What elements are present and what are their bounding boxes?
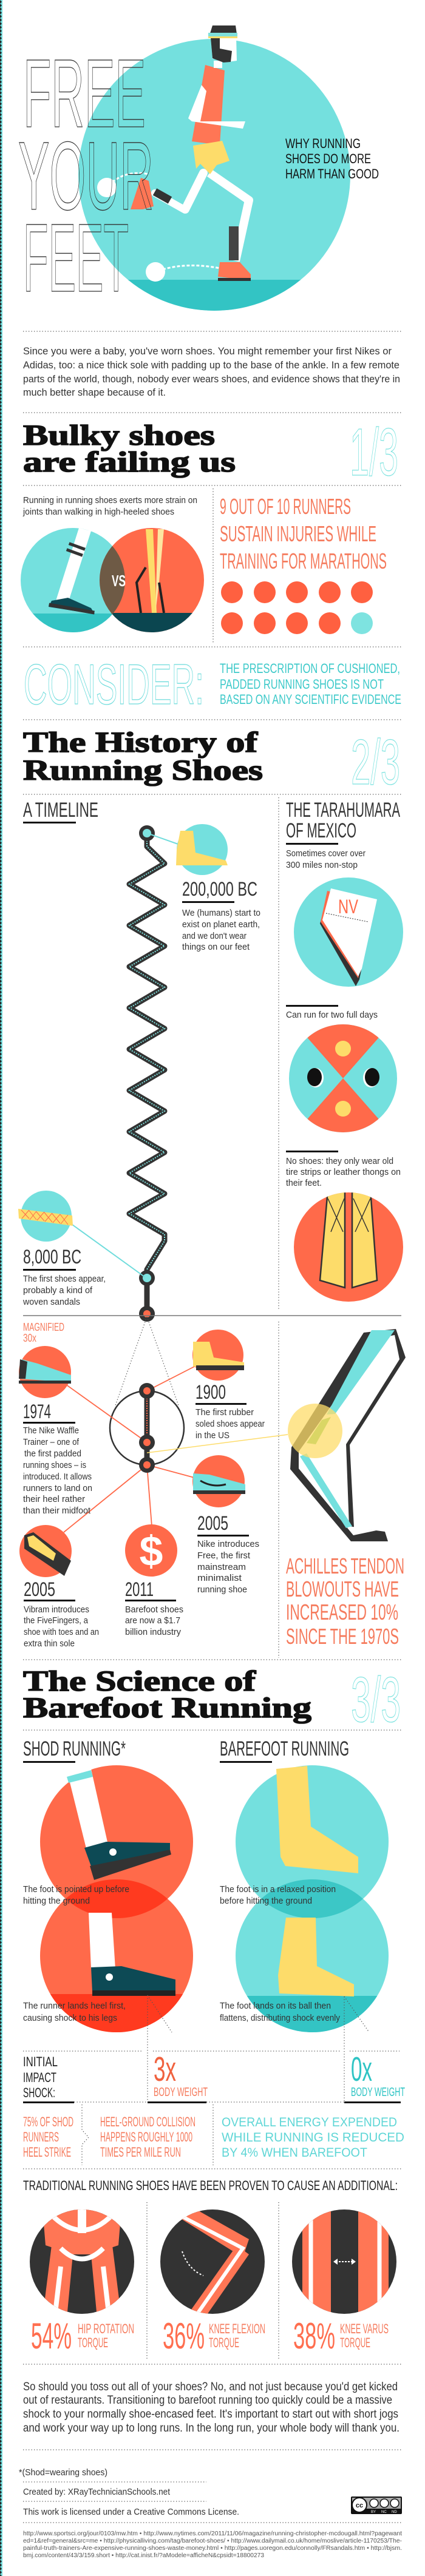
captions: foot position xyxy=(23,1884,336,1906)
heading: The History of Running Shoes: Running Shoes xyxy=(23,754,263,786)
icon: Nevada map xyxy=(294,877,403,987)
heading: Bulky shoes are failing us: Bulky shoes xyxy=(23,419,215,451)
subtitle: HARM THAN GOOD xyxy=(285,166,379,181)
timeline entry: 2005 Vibram: 2005 xyxy=(24,1578,55,1600)
conclusion paragraph xyxy=(23,2381,399,2435)
icon: Vibram FiveFingers xyxy=(19,1525,72,1577)
intro paragraph: much better shape because of it. xyxy=(23,387,166,398)
stat: heel-ground collision xyxy=(100,2114,195,2160)
illustration: shod running circles xyxy=(36,1765,200,2037)
stat: heel-ground collision: HAPPENS ROUGHLY 1000 xyxy=(100,2129,192,2145)
icon: landing bare foot xyxy=(278,1918,354,1996)
label: magnified 30x xyxy=(23,1321,64,1344)
timeline entry: 2011: Barefoot shoes xyxy=(125,1604,183,1615)
stat: 3x body weight: BODY WEIGHT xyxy=(154,2086,208,2099)
timeline entry: 1974: than their midfoot xyxy=(23,1506,91,1516)
intro paragraph: Since you were a baby, you've worn shoes. You might remember your first Nikes or xyxy=(23,345,392,357)
timeline entry: 2005 Vibram: Vibram introduces xyxy=(24,1604,89,1615)
hero illustration: runner in circle xyxy=(73,25,358,316)
icon: ball and chain front xyxy=(146,262,220,282)
icon: dollar sign xyxy=(125,1524,177,1577)
title: FREE YOUR FEET: FREE xyxy=(23,39,146,147)
timeline entry: 2005 Nike Free: Free, the first xyxy=(197,1550,251,1561)
timeline entry: 2005 Nike Free xyxy=(197,1512,259,1595)
stat: 36% knee flexion torque: TORQUE xyxy=(209,2335,239,2350)
heading: The Science of Barefoot Running xyxy=(23,1665,311,1724)
icon: shoe landing heel xyxy=(89,1913,175,1996)
subheading: shod running: SHOD RUNNING* xyxy=(23,1737,126,1760)
stat: 38% knee varus torque: TORQUE xyxy=(340,2335,370,2350)
stat: 75% heel strike: HEEL STRIKE xyxy=(23,2145,71,2160)
sources: painful-truth-trainers-Are-expensive-running-shoes-waste-money.html • http://pages.uoregon.edu/connolly/FRsandals.htm • http://bjsm. xyxy=(23,2545,402,2552)
text: YOUR xyxy=(18,121,154,230)
footnote: *(Shod=wearing shoes) xyxy=(19,2467,107,2478)
label: magnified 30x: 30x xyxy=(23,1332,36,1344)
icon: 1900 boot xyxy=(192,1330,244,1381)
timeline entry: 1974 xyxy=(23,1401,92,1516)
icon: bare foot 200,000 BC xyxy=(151,824,228,875)
timeline entry: 2005 Vibram: shoe with toes and an xyxy=(24,1627,99,1637)
label: initial impact shock: SHOCK: xyxy=(23,2085,55,2100)
subheading: shod running xyxy=(23,1737,126,1763)
stat: energy reduced 4%: WHILE RUNNING IS REDUCED xyxy=(222,2131,404,2145)
timeline entry: 200,000 BC: We (humans) start to xyxy=(182,908,260,918)
timeline entry: 200,000 BC: and we don't wear xyxy=(182,931,246,941)
captions: landing: The foot lands on its ball then xyxy=(220,2001,331,2011)
timeline entry: 2005 Vibram xyxy=(24,1578,99,1649)
captions: foot position: The foot is in a relaxed position xyxy=(220,1884,336,1895)
text: two full days: Can run for two full days xyxy=(286,1010,378,1020)
stat: energy reduced 4% xyxy=(222,2115,404,2160)
timeline entry: 200,000 BC xyxy=(182,878,260,952)
timeline entry: 1900: 1900 xyxy=(195,1381,226,1403)
timeline zigzag path xyxy=(129,825,165,1322)
captions: foot position: The foot is pointed up before xyxy=(23,1884,129,1895)
stat: heel-ground collision: HEEL-GROUND COLLISION xyxy=(100,2114,195,2129)
timeline entry: 200,000 BC: 200,000 BC xyxy=(182,878,257,900)
license text: This work is licensed under a Creative Commons License. xyxy=(23,2507,239,2517)
text: 300 miles xyxy=(286,848,365,870)
title: FREE YOUR FEET xyxy=(18,39,154,312)
stat: 75% heel strike xyxy=(23,2114,73,2160)
timeline entry: 1900: The first rubber xyxy=(195,1407,254,1418)
heading: The Science of Barefoot Running: The Science of xyxy=(23,1665,256,1697)
dot chart: 9 of 10 xyxy=(221,581,373,634)
timeline entry: 200,000 BC: things on our feet xyxy=(182,942,250,952)
stat: 0x body weight xyxy=(344,2050,405,2103)
icon: sneaker leg xyxy=(49,528,95,615)
stat: 9 out of 10 runners xyxy=(220,494,387,573)
subheading: The Tarahumara of Mexico: OF MEXICO xyxy=(286,819,356,842)
timeline entry: 1974: runners to land on xyxy=(23,1483,92,1493)
icon: knee varus x-ray xyxy=(292,2206,396,2321)
stat: 75% heel strike: 75% OF SHOD xyxy=(23,2114,73,2129)
heading: Bulky shoes are failing us: are failing us xyxy=(23,446,236,478)
captions: landing xyxy=(23,2001,340,2023)
magnified timeline xyxy=(64,1317,288,1532)
timeline entry: 2005 Vibram: extra thin sole xyxy=(24,1638,75,1649)
stat: 75% heel strike: RUNNERS xyxy=(23,2129,59,2145)
timeline entry: 8,000 BC: probably a kind of xyxy=(23,1285,93,1296)
timeline entry: 1974: introduced. It allows xyxy=(23,1472,92,1482)
captions: landing: causing shock to his legs xyxy=(23,2013,117,2023)
icon: tribal pattern circle xyxy=(289,1019,397,1137)
captions: foot position: hitting the ground xyxy=(23,1896,90,1906)
timeline entry: 2005 Nike Free: minimalist xyxy=(197,1573,242,1583)
stat: 36% knee flexion torque: 36% xyxy=(163,2316,205,2356)
icon: hip x-ray xyxy=(30,2209,134,2318)
stat: heel-ground collision: TIMES PER MILE RUN xyxy=(100,2145,181,2160)
icon: knee flexion x-ray xyxy=(160,2209,265,2314)
timeline entry: 2005 Nike Free: 2005 xyxy=(197,1512,228,1534)
timeline entry: 1974: running shoes – is xyxy=(23,1460,86,1470)
icon: creative commons badge: NC xyxy=(381,2510,387,2514)
heading: The History of Running Shoes: The History of xyxy=(23,726,258,759)
icon: 1974 waffle trainer xyxy=(19,1346,71,1398)
timeline entry: 1974: their heel rather xyxy=(23,1494,85,1504)
timeline entry: 2005 Nike Free: running shoe xyxy=(197,1584,247,1595)
timeline entry: 8,000 BC: woven sandals xyxy=(22,1297,80,1307)
impact pointer lines xyxy=(23,1995,399,2101)
heading: The History of Running Shoes xyxy=(23,726,263,786)
heading: The Science of Barefoot Running: Barefoot Running xyxy=(23,1692,311,1724)
captions: foot position: before hitting the ground xyxy=(220,1896,312,1906)
timeline entry: 2005 Nike Free: Nike introduces xyxy=(197,1539,259,1549)
timeline entry: 2011: billion industry xyxy=(125,1627,181,1637)
stat: 54% hip rotation torque: 54% xyxy=(31,2316,72,2356)
stat: achilles tendon blowouts xyxy=(286,1553,404,1649)
stat: 3x body weight: 3x xyxy=(154,2050,176,2089)
text: running strain: joints than walking in high-heeled shoes xyxy=(22,507,174,517)
captions: landing: flattens, distributing shock evenly xyxy=(220,2013,340,2023)
intro paragraph: Adidas, too: a nice thick sole with padding up to the base of the ankle. In a few remote xyxy=(23,359,399,371)
icon: shoe pointed up xyxy=(67,1769,171,1880)
subtitle xyxy=(285,136,379,181)
illustration: barefoot running circles xyxy=(231,1765,395,2038)
title: FREE YOUR FEET: FEET xyxy=(23,203,129,312)
icon: Nevada map: NV xyxy=(338,896,358,918)
timeline entry: 8,000 BC: 8,000 BC xyxy=(23,1246,81,1268)
text: no shoes: tire strips or leather thongs on xyxy=(286,1167,401,1177)
icon: ball and chain back xyxy=(97,173,149,197)
text: 300 miles: Sometimes cover over xyxy=(286,848,365,859)
sources: http://www.sportsci.org/jour/0103/mw.htm • http://www.nytimes.com/2011/11/06/magazine/running-christopher-mcdougall.html?pagewant xyxy=(23,2530,402,2537)
timeline entry: 2005 Nike Free: mainstream xyxy=(197,1562,246,1572)
timeline entry: 200,000 BC: exist on planet earth, xyxy=(182,919,260,930)
illustration: sneaker vs high heels: VS xyxy=(112,572,126,590)
icon: creative commons badge: ND xyxy=(392,2510,397,2514)
text: no shoes: their feet. xyxy=(286,1178,322,1188)
stat: 54% hip rotation torque: TORQUE xyxy=(78,2335,108,2350)
text: two full days xyxy=(286,1005,378,1020)
timeline entry: 8,000 BC: The first shoes appear, xyxy=(23,1274,106,1284)
timeline entry: 1974: the first padded xyxy=(24,1449,81,1459)
timeline entry: 1900: soled shoes appear xyxy=(195,1419,265,1429)
intro paragraph: parts of the world, though, nobody ever wears shoes, and evidence shows that they're in xyxy=(23,373,400,385)
sources xyxy=(23,2530,402,2559)
icon: creative commons badge: BY xyxy=(371,2510,376,2514)
timeline entry: 1900: in the US xyxy=(195,1430,229,1441)
timeline entry: 1974: 1974 xyxy=(23,1401,51,1422)
subtitle: WHY RUNNING xyxy=(285,136,361,151)
icon: creative commons badge: cc xyxy=(356,2502,363,2509)
text: no shoes: No shoes: they only wear old xyxy=(286,1156,393,1166)
sources: ed=1&ref=general&src=me • http://physicalliving.com/tag/barefoot-shoes/ • http://www.dailymail.co.uk/home/moslive/article-1170253/The- xyxy=(23,2538,402,2544)
icon: dollar sign: $ xyxy=(140,1527,163,1575)
label: initial impact shock xyxy=(23,2054,74,2103)
stat: 3x body weight xyxy=(148,2050,208,2103)
text: running strain xyxy=(22,495,197,517)
timeline entry: 1974: Trainer – one of xyxy=(23,1437,80,1447)
intro paragraph xyxy=(23,345,400,398)
subheading: A timeline xyxy=(23,799,98,823)
text: no shoes xyxy=(286,1151,401,1188)
timeline entry: 2011: are now a $1.7 xyxy=(125,1615,180,1626)
consider callout: CONSIDER: xyxy=(24,652,204,716)
icon: creative commons badge xyxy=(351,2497,402,2514)
icon: relaxed bare foot xyxy=(276,1766,358,1873)
icon: Nike Free xyxy=(192,1455,245,1507)
text: 300 miles: 300 miles non-stop xyxy=(286,860,358,870)
label: initial impact shock: INITIAL xyxy=(23,2054,58,2069)
timeline entry: 2005 Vibram: the FiveFingers, a xyxy=(24,1615,89,1626)
timeline entry: 1900 xyxy=(195,1381,265,1441)
stat: energy reduced 4%: OVERALL ENERGY EXPENDED xyxy=(222,2115,397,2129)
sources: bmj.com/content/43/3/159.short • http://cat.inist.fr/?aModele=afficheN&cpsidt=18800273 xyxy=(23,2552,264,2559)
subtitle: SHOES DO MORE xyxy=(285,151,371,166)
captions: landing: The runner lands heel first, xyxy=(23,2001,126,2011)
timeline entry: 2011 xyxy=(125,1578,183,1637)
subheading: A timeline: A TIMELINE xyxy=(23,799,98,822)
illustration: achilles tendon leg xyxy=(288,1329,406,1541)
stat: 38% knee varus torque: 38% xyxy=(293,2316,335,2356)
text: running strain: Running in running shoes exerts more strain on xyxy=(23,495,197,505)
heading: Bulky shoes are failing us xyxy=(23,419,236,478)
label: initial impact shock: IMPACT xyxy=(23,2070,56,2085)
icon: woven sandal 8,000 BC xyxy=(18,1191,144,1277)
subheading: The Tarahumara of Mexico xyxy=(286,799,400,845)
runner figure xyxy=(131,25,251,281)
subheading: barefoot running xyxy=(220,1737,349,1763)
timeline entry: 8,000 BC xyxy=(22,1246,106,1307)
stat: 36% knee flexion torque: KNEE FLEXION xyxy=(209,2321,265,2336)
stat: 38% knee varus torque: KNEE VARUS xyxy=(340,2321,389,2336)
icon: sandal legs xyxy=(294,1189,403,1302)
stat: energy reduced 4%: BY 4% WHEN BAREFOOT xyxy=(222,2146,367,2160)
credit: Created by: XRayTechnicianSchools.net xyxy=(23,2487,171,2497)
stat: 0x body weight: 0x xyxy=(351,2050,372,2089)
timeline entry: 1974: The Nike Waffle xyxy=(23,1425,79,1436)
stat: 54% hip rotation torque: HIP ROTATION xyxy=(78,2321,134,2336)
timeline entry: 2011: 2011 xyxy=(125,1578,154,1600)
label: magnified 30x: MAGNIFIED xyxy=(23,1321,64,1333)
icon: high heels legs xyxy=(137,529,164,613)
illustration: sneaker vs high heels xyxy=(18,528,206,638)
